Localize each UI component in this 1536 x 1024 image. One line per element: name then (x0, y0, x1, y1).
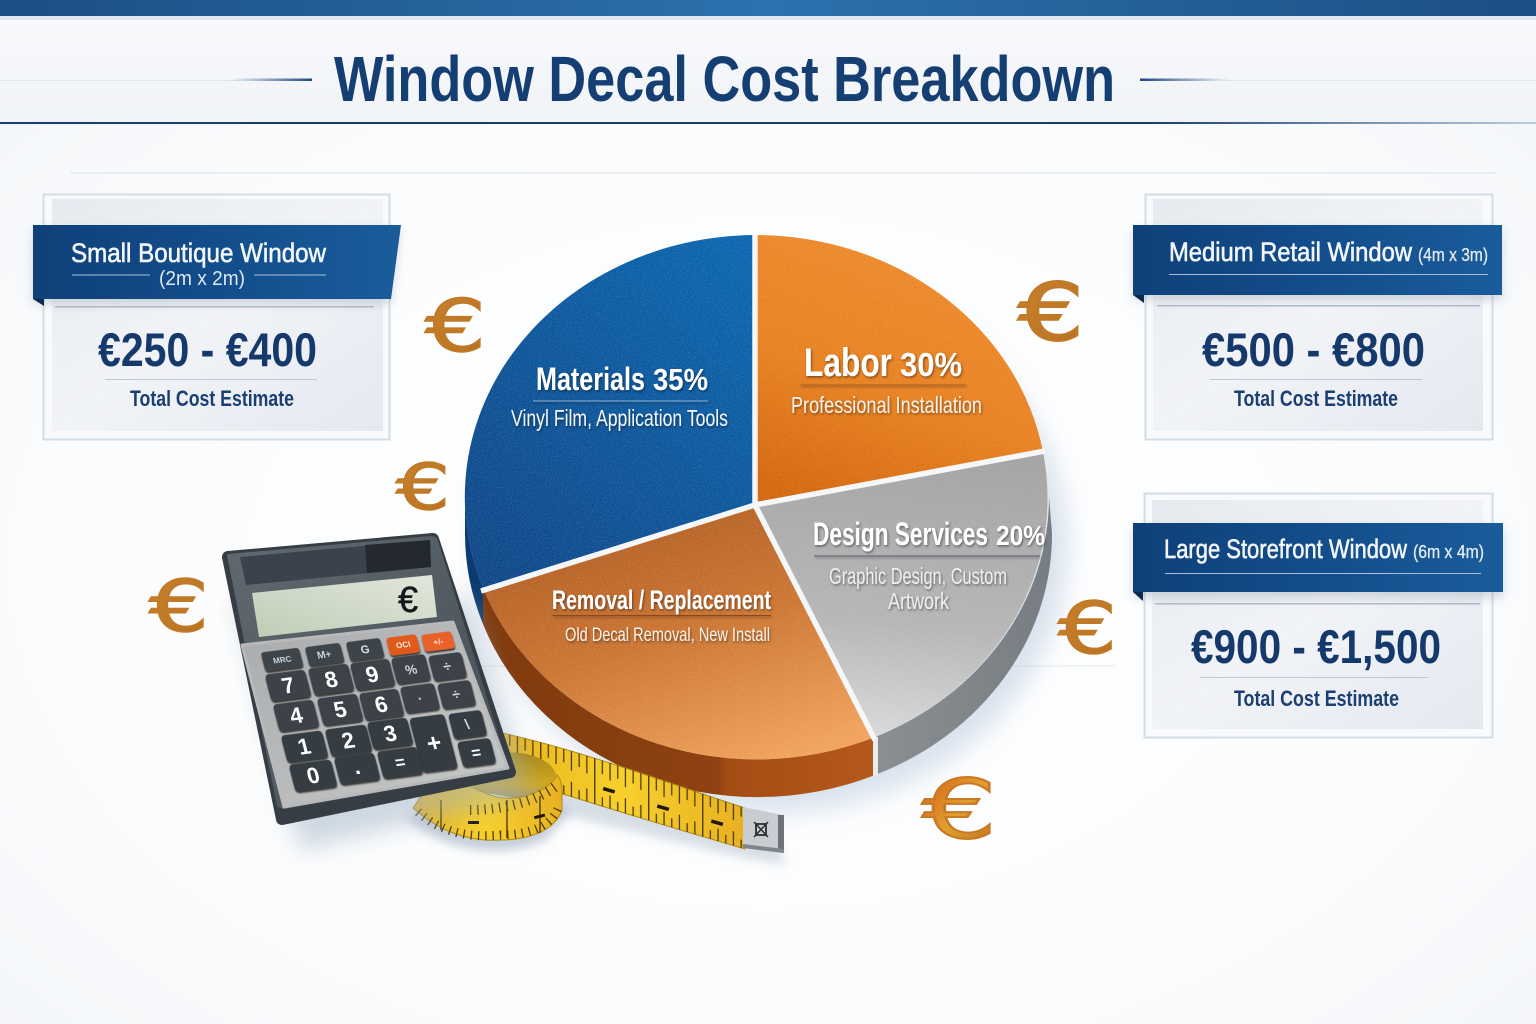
slice: design services (755, 452, 1048, 737)
ribbon: large storefront window: (6m x 4m) (1413, 542, 1484, 562)
calculator keys: ÷ (441, 659, 453, 675)
ribbon: small boutique window: (2m x 2m) (159, 268, 245, 290)
calculator keys: 2 (339, 728, 357, 754)
panel: large storefront window (1133, 494, 1503, 738)
calculator (228, 537, 530, 850)
calculator keys: 5 (331, 697, 349, 723)
label: labor (791, 341, 982, 418)
calculator keys: G (359, 644, 371, 656)
tape coil (413, 753, 562, 840)
ribbon: medium retail window (1133, 225, 1502, 303)
label: labor: 30% (900, 346, 962, 383)
ribbon: large storefront window (1133, 523, 1503, 601)
calculator keys: 8 (322, 667, 340, 693)
calculator keys: 3 (381, 721, 399, 747)
calculator body (228, 539, 510, 819)
caption: large storefront window: Total Cost Estimate (1234, 686, 1399, 711)
calculator keys: · (416, 691, 424, 706)
calculator keys: = (469, 744, 483, 763)
tape ribbon (502, 733, 745, 849)
price: medium retail window: €500 - €800 (1202, 323, 1425, 376)
caption: medium retail window: Total Cost Estimate (1234, 386, 1398, 411)
ribbon: medium retail window: Medium Retail Window (1169, 237, 1412, 267)
calculator display (252, 575, 437, 637)
label: design services: Design Services (813, 516, 988, 552)
calculator keys: % (403, 661, 419, 678)
calculator display: € (398, 579, 418, 620)
icon: euro upper left: € (425, 284, 486, 368)
ribbon: medium retail window: (4m x 3m) (1418, 245, 1488, 265)
label: design services: Artwork (888, 588, 949, 614)
label: design services: Graphic Design, Custom (829, 563, 1007, 589)
pie chart (465, 235, 1068, 813)
slice: labor (755, 235, 1043, 505)
measuring tape (405, 733, 785, 864)
euro symbols (149, 267, 1117, 858)
calculator keys: M+ (316, 649, 333, 662)
calculator keys: OCI (395, 640, 412, 650)
icon: euro far left: € (149, 565, 209, 648)
calculator key face (242, 622, 508, 807)
calculator keys: MRC (272, 654, 293, 666)
panel: small boutique window (33, 194, 401, 440)
calculator keys (261, 631, 496, 792)
label: design services: 20% (996, 520, 1045, 551)
ribbon: small boutique window (33, 225, 401, 306)
calculator keys: 9 (363, 662, 381, 688)
calculator keys: \ (463, 717, 471, 733)
price: small boutique window: €250 - €400 (98, 323, 317, 376)
tape end tab (743, 807, 784, 853)
solar panel (240, 540, 431, 585)
caption: small boutique window: Total Cost Estimate (130, 386, 294, 411)
icon: euro upper right: € (1018, 267, 1084, 359)
label: materials: Materials (536, 361, 645, 397)
ribbon: small boutique window: Small Boutique Window (71, 238, 326, 268)
calculator keys: . (350, 754, 363, 779)
calculator keys: +/- (432, 637, 444, 647)
calculator keys: 6 (372, 692, 390, 718)
label: labor: Professional Installation (791, 392, 982, 418)
label: removal and replacement: Old Decal Removal, New Install (565, 625, 770, 646)
header band (0, 0, 1536, 124)
icon: euro right: € (1058, 587, 1117, 670)
ribbon: large storefront window: Large Storefront Window (1164, 534, 1407, 564)
label: design services (813, 516, 1045, 614)
calculator keys: 0 (304, 763, 322, 789)
label: removal and replacement (552, 585, 771, 646)
price: large storefront window: €900 - €1,500 (1191, 620, 1441, 673)
calculator keys: 7 (279, 673, 297, 699)
label: materials (511, 361, 728, 431)
icon: euro middle left: € (396, 451, 450, 524)
pie side wall (465, 497, 1052, 797)
label: labor: Labor (804, 341, 892, 385)
calculator keys: 1 (295, 734, 313, 760)
label: materials: 35% (653, 362, 708, 397)
title: Window Decal Cost Breakdown (334, 43, 1115, 115)
panel: medium retail window (1133, 194, 1502, 440)
slice: materials (465, 235, 755, 588)
calculator keys: ÷ (450, 687, 462, 703)
icon: euro bottom: € (922, 763, 997, 858)
calculator keys: = (393, 752, 408, 773)
label: removal and replacement: Removal / Replacement (552, 585, 771, 615)
slice: removal and replacement (483, 505, 875, 759)
calculator keys: + (424, 730, 445, 758)
label: materials: Vinyl Film, Application Tools (511, 405, 728, 431)
calculator keys: 4 (287, 703, 306, 729)
